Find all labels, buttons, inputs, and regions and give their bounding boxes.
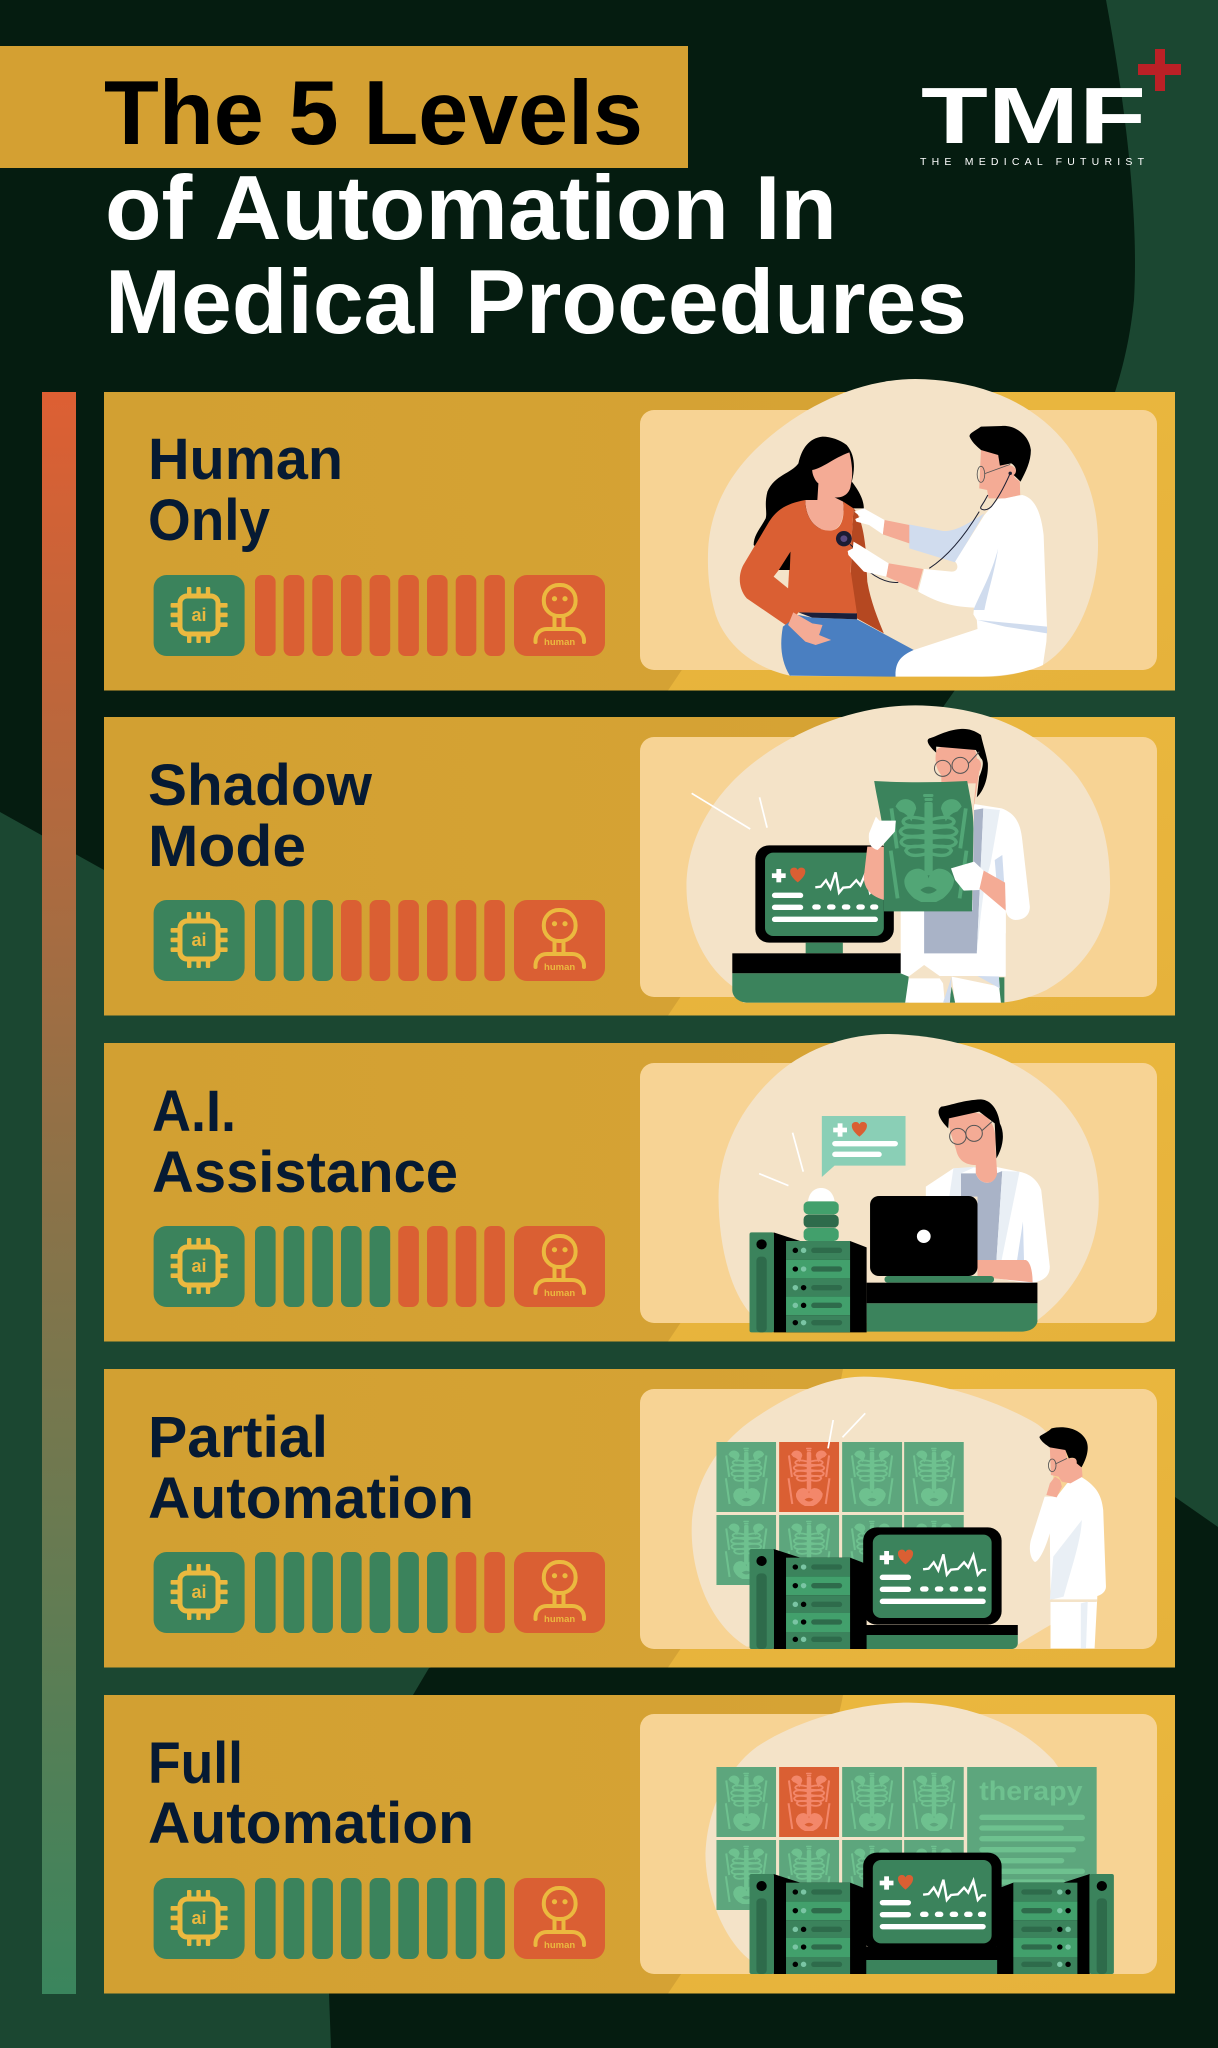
progress bars: 9 ai, 0 human: [255, 1878, 505, 1959]
ai icon: ai: [191, 930, 207, 950]
illustration: doctor reviewing x-ray wall: [692, 1377, 1106, 1649]
logo: The Medical Futurist: TMF: [921, 71, 1146, 160]
ai icon: [154, 1552, 245, 1633]
heading: Full Automation: Automation: [148, 1791, 474, 1856]
heading: Full Automation: [148, 1731, 474, 1856]
panel: Partial Automation: [104, 1369, 1175, 1668]
heading: Shadow Mode: Shadow: [148, 753, 373, 818]
human icon: human: [544, 962, 575, 973]
ai icon: [154, 900, 245, 981]
ai icon: ai: [191, 1582, 207, 1602]
progress bars: 0 ai, 9 human: [255, 575, 505, 656]
heading: Partial Automation: Partial: [148, 1405, 328, 1470]
illustration: x-ray wall, therapy sheet and servers: therapy: [979, 1775, 1083, 1806]
panel: Full Automation: [104, 1695, 1175, 1994]
human icon: [514, 575, 605, 656]
heading: A.I. Assistance: [152, 1079, 458, 1205]
title: [104, 63, 967, 353]
logo: The Medical Futurist: [920, 49, 1181, 168]
heading: Human Only: Only: [148, 488, 270, 553]
heading: Partial Automation: [148, 1405, 474, 1531]
level gradient bar: [42, 392, 76, 1994]
human icon: human: [544, 637, 575, 648]
heading: Partial Automation: Automation: [148, 1466, 474, 1531]
ai icon: ai: [191, 1908, 207, 1928]
progress bars: 5 ai, 4 human: [255, 1226, 505, 1307]
illustration: doctor with laptop and server: [719, 1034, 1099, 1332]
human icon: [514, 1878, 605, 1959]
ai icon: [154, 575, 245, 656]
title: Medical Procedures: [105, 252, 967, 353]
illustration: x-ray wall, therapy sheet and servers: [705, 1703, 1114, 1974]
human icon: human: [544, 1614, 575, 1625]
human icon: [514, 900, 605, 981]
human icon: human: [544, 1288, 575, 1299]
heading: A.I. Assistance: Assistance: [152, 1140, 458, 1205]
human icon: [514, 1552, 605, 1633]
ai icon: [154, 1226, 245, 1307]
progress bars: 7 ai, 2 human: [255, 1552, 505, 1633]
title: The 5 Levels: [104, 63, 643, 164]
panel: Shadow Mode: [104, 717, 1175, 1016]
ai icon: ai: [191, 1256, 207, 1276]
ai icon: [154, 1878, 245, 1959]
heading: Shadow Mode: [148, 753, 373, 879]
progress bars: 3 ai, 6 human: [255, 900, 505, 981]
title banner: [0, 46, 688, 168]
logo: The Medical Futurist: THE MEDICAL FUTURIST: [920, 156, 1145, 168]
human icon: [514, 1226, 605, 1307]
heading: A.I. Assistance: A.I.: [152, 1079, 236, 1144]
heading: Human Only: [148, 427, 343, 553]
heading: Shadow Mode: Mode: [148, 814, 306, 879]
illustration: doctor examining patient: [708, 379, 1098, 677]
heading: Full Automation: Full: [148, 1731, 243, 1796]
ai icon: ai: [191, 605, 207, 625]
title: of Automation In: [105, 158, 837, 259]
human icon: human: [544, 1940, 575, 1951]
panel: Human Only: [104, 392, 1175, 690]
illustration: doctor reading x-ray: [686, 705, 1110, 1003]
panel: A.I. Assistance: [104, 1043, 1175, 1342]
heading: Human Only: Human: [148, 427, 343, 492]
